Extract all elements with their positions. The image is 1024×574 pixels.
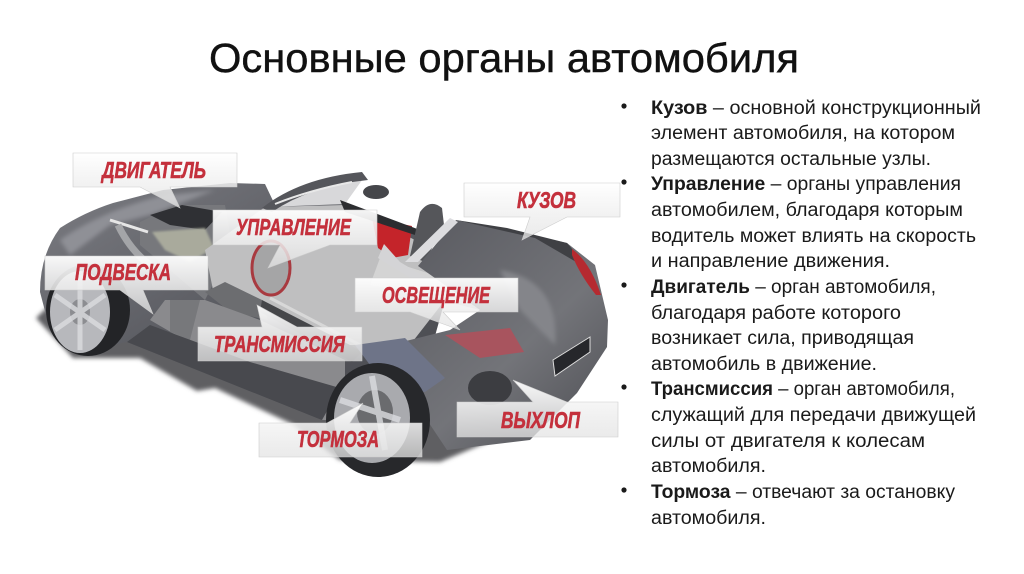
bullet: тормоза: автомобиля. — [651, 508, 766, 529]
label: кузов — [464, 183, 620, 240]
red interior — [372, 218, 412, 258]
label: управление — [213, 210, 377, 268]
bullet: управление: водитель может влиять на скорость — [651, 226, 976, 247]
door top — [340, 200, 420, 236]
windshield glass — [268, 176, 365, 207]
label: освещение — [355, 278, 518, 330]
bullet: кузов — [621, 98, 981, 170]
car body front — [40, 183, 445, 420]
bullet: трансмиссия — [621, 379, 976, 477]
silver strip rear — [405, 218, 458, 262]
cabin cutaway — [205, 205, 445, 345]
trunk dark — [456, 220, 590, 270]
silver strips — [370, 258, 480, 310]
wheel arch shade — [500, 270, 555, 345]
label: трансмиссия — [198, 305, 362, 361]
licence plate — [553, 337, 590, 376]
bullet: двигатель — [621, 277, 936, 375]
bullet: трансмиссия: Трансмиссия – орган автомобиля, — [651, 379, 955, 400]
ground shadow — [36, 295, 540, 462]
label: двигатель: ДВИГАТЕЛЬ — [101, 157, 206, 183]
bullet: трансмиссия: служащий для передачи движущей — [651, 405, 976, 426]
label: тормоза — [259, 403, 422, 457]
engine bay — [110, 205, 232, 300]
bullet: управление: автомобилем, благодаря которым — [651, 200, 963, 221]
label: тормоза: ТОРМОЗА — [297, 426, 379, 452]
tail lamp right — [572, 249, 601, 295]
label: освещение: ОСВЕЩЕНИЕ — [382, 282, 490, 308]
bullet: тормоза: Тормоза – отвечают за остановку — [651, 482, 956, 503]
door lower — [150, 300, 345, 420]
bullet: управление: и направление движения. — [651, 251, 890, 272]
label: управление: УПРАВЛЕНИЕ — [236, 214, 351, 240]
bullet: кузов: размещаются остальные узлы. — [651, 149, 931, 170]
bullet: кузов: Кузов – основной конструкционный — [651, 98, 981, 119]
tail lamp cutaway — [445, 328, 524, 358]
bullet: двигатель: благодаря работе которого — [651, 303, 901, 324]
bullet: трансмиссия: силы от двигателя к колесам — [651, 431, 925, 452]
label: выхлоп: ВЫХЛОП — [501, 407, 580, 433]
bullet: двигатель: возникает сила, приводящая — [651, 328, 914, 349]
bullet: управление — [621, 174, 976, 272]
bullet: управление: Управление – органы управления — [651, 174, 961, 195]
windshield frame — [262, 172, 368, 212]
bullet list — [621, 98, 981, 529]
label: подвеска — [45, 256, 208, 314]
car illustration — [36, 172, 608, 477]
hood highlight — [60, 190, 215, 255]
bullet: двигатель: автомобиль в движение. — [651, 354, 877, 375]
label: трансмиссия: ТРАНСМИССИЯ — [214, 331, 346, 357]
label: выхлоп — [457, 380, 618, 437]
exhaust — [468, 371, 512, 405]
rear suspension — [355, 338, 445, 392]
bullet: двигатель: Двигатель – орган автомобиля, — [651, 277, 936, 298]
seat — [410, 204, 444, 262]
bullet: трансмиссия: автомобиля. — [651, 456, 766, 477]
rear body — [370, 220, 608, 450]
bullet: кузов: элемент автомобиля, на котором — [651, 123, 955, 144]
label: кузов: КУЗОВ — [517, 187, 576, 213]
drivetrain — [205, 282, 362, 362]
mirror — [363, 185, 389, 199]
side sill — [127, 325, 340, 420]
bullet: тормоза — [621, 482, 956, 529]
label: двигатель — [73, 153, 237, 208]
front wheel — [46, 264, 130, 356]
title: Основные органы автомобиля — [209, 35, 799, 81]
rear wheel — [326, 363, 430, 477]
label: подвеска: ПОДВЕСКА — [75, 259, 171, 285]
steering wheel — [252, 241, 290, 295]
